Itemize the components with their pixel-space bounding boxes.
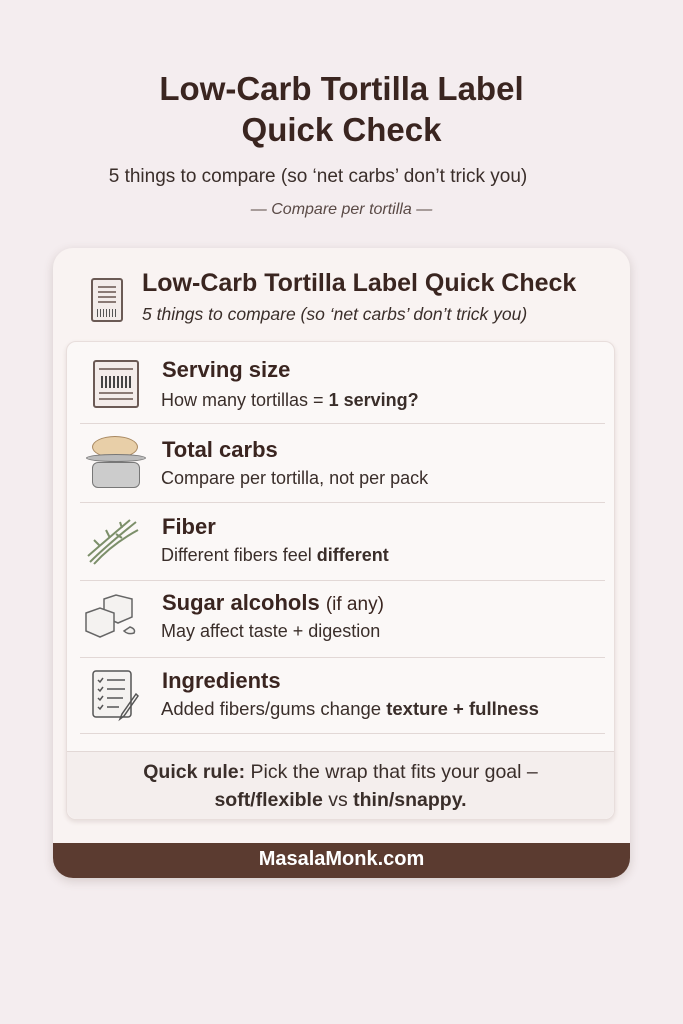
- icon: fiber strands: [87, 519, 138, 565]
- subtitle: 5 things to compare (so ‘net carbs’ don’t trick you): [109, 166, 527, 187]
- row: fiber: Different fibers feel different: [161, 545, 389, 565]
- title: Quick Check: [242, 111, 441, 148]
- icon: label: [91, 278, 123, 322]
- inner panel: [66, 341, 615, 820]
- row: sugar alcohols: Sugar alcohols (if any): [162, 590, 384, 615]
- title: [159, 70, 524, 148]
- row: ingredients: [92, 668, 539, 722]
- icon: sugar cubes: [85, 594, 136, 638]
- quick rule: Quick rule: Pick the wrap that fits your goal –: [143, 761, 538, 783]
- quick rule: [67, 751, 614, 819]
- row: total carbs: Total carbs: [162, 437, 278, 462]
- card: [53, 248, 630, 878]
- row: ingredients: Ingredients: [162, 668, 281, 693]
- row: serving size: Serving size: [162, 357, 290, 382]
- card subheading: 5 things to compare (so ‘net carbs’ don’t trick you): [142, 304, 527, 324]
- title: Low-Carb Tortilla Label: [159, 70, 524, 107]
- tagline: — Compare per tortilla —: [251, 201, 432, 218]
- footer bar: MasalaMonk.com: [259, 848, 424, 870]
- row: fiber: Fiber: [162, 514, 216, 539]
- row: sugar alcohols: May affect taste + digestion: [161, 621, 380, 641]
- row: serving size: [93, 357, 419, 410]
- icon: checklist: [92, 670, 139, 722]
- row: sugar alcohols: [85, 590, 384, 641]
- icon: nutrition label: [93, 360, 139, 408]
- row: fiber: [87, 514, 389, 565]
- row: ingredients: Added fibers/gums change texture + fullness: [161, 698, 539, 719]
- footer bar: [53, 843, 630, 878]
- row: serving size: How many tortillas = 1 serving?: [161, 390, 419, 410]
- quick rule: soft/flexible vs thin/snappy.: [214, 789, 467, 811]
- row: total carbs: Compare per tortilla, not per pack: [161, 468, 428, 488]
- card heading: Low-Carb Tortilla Label Quick Check: [142, 269, 576, 297]
- icon: scale with tortillas: [86, 436, 146, 488]
- row: total carbs: [86, 436, 428, 488]
